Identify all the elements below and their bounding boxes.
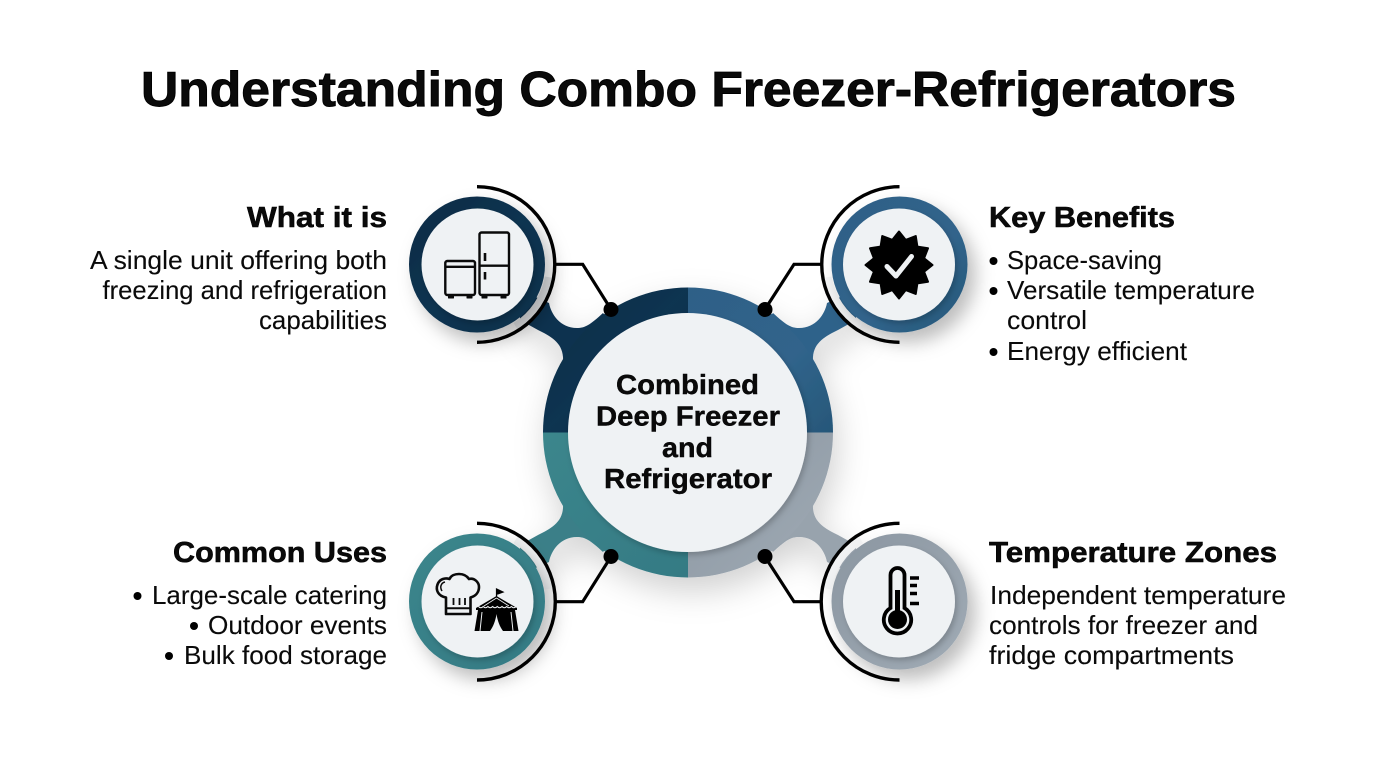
ring with connecting arms — [520, 288, 856, 578]
text block: common uses: Large-scale catering — [152, 580, 387, 610]
connector with dot — [555, 264, 618, 317]
text block: common uses — [134, 537, 387, 670]
icon: thermometer — [884, 568, 919, 633]
arm and ring segment: bottom left — [520, 432, 688, 578]
icon disc — [409, 534, 545, 670]
node: key benefits — [758, 187, 968, 342]
node: common uses — [409, 523, 618, 680]
text block: common uses: Bulk food storage — [184, 640, 387, 670]
gap crescent — [516, 277, 549, 326]
arm and ring segment: top left — [520, 288, 688, 432]
center label — [596, 369, 780, 494]
icon: chef hat — [437, 574, 479, 614]
icon: event tent — [474, 589, 518, 631]
text block: key benefits — [989, 202, 1255, 366]
gap crescent — [828, 277, 861, 326]
arm and ring segment: bottom right — [688, 432, 856, 578]
connector with dot — [758, 549, 821, 602]
center label: and — [662, 432, 713, 463]
center label: Combined — [616, 369, 759, 400]
arc — [477, 523, 555, 680]
text block: what it is: freezing and refrigeration — [102, 275, 387, 305]
connector with dot — [758, 264, 821, 317]
text block: what it is: What it is — [247, 202, 387, 234]
text block: what it is — [90, 202, 387, 335]
node: temperature zones — [758, 523, 968, 680]
text block: temperature zones: Independent temperature — [990, 580, 1286, 610]
icon disc — [832, 196, 968, 332]
title: Understanding Combo Freezer-Refrigerators — [141, 63, 1236, 117]
icon disc — [409, 196, 545, 332]
text block: temperature zones — [989, 537, 1286, 670]
arc — [821, 523, 900, 680]
text block: common uses: Outdoor events — [208, 610, 387, 640]
icon: freezer and fridge — [445, 232, 509, 298]
center label: Refrigerator — [604, 463, 772, 494]
text block: temperature zones: fridge compartments — [989, 640, 1234, 670]
arm and ring segment: top right — [688, 288, 856, 432]
text block: temperature zones: controls for freezer and — [989, 610, 1258, 640]
gap crescent — [828, 540, 861, 589]
text block: key benefits: Versatile temperature — [1007, 275, 1255, 305]
center label: Deep Freezer — [596, 400, 780, 432]
text block: common uses: Common Uses — [173, 537, 387, 569]
arc — [477, 187, 555, 342]
text block: key benefits: control — [1007, 305, 1087, 335]
central hub diagram — [520, 288, 856, 578]
center circle — [568, 313, 807, 552]
gap crescent — [516, 540, 549, 589]
icon disc — [832, 534, 968, 670]
arc — [822, 187, 900, 342]
text block: what it is: A single unit offering both — [90, 245, 387, 275]
node: what it is — [409, 187, 618, 342]
text block: key benefits: Key Benefits — [989, 202, 1175, 234]
text block: temperature zones: Temperature Zones — [989, 537, 1277, 569]
icon: verified badge — [866, 232, 932, 298]
text block: key benefits: Energy efficient — [1007, 336, 1188, 366]
connector with dot — [555, 549, 618, 602]
text block: key benefits: Space-saving — [1007, 245, 1162, 275]
text block: what it is: capabilities — [259, 305, 387, 335]
